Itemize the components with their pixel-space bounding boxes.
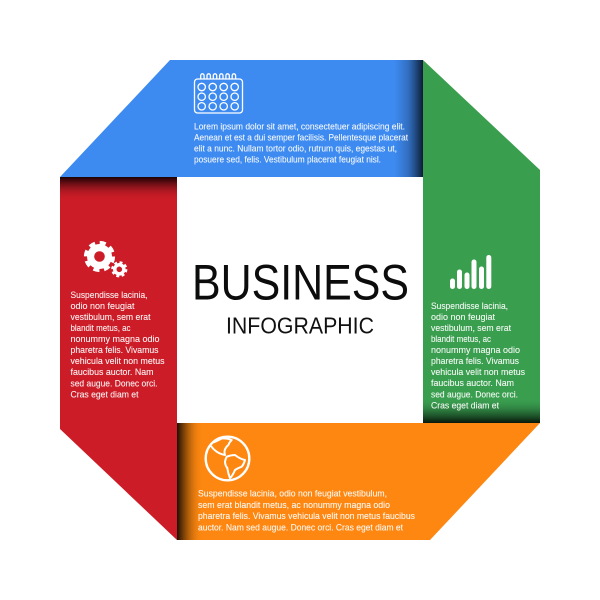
- text: red panel: sed augue. Donec orci.: [70, 378, 158, 390]
- text: green panel: odio non feugiat: [431, 312, 495, 323]
- icon: globe: [206, 437, 249, 480]
- text: green panel: nonummy magna odio: [431, 345, 520, 356]
- icon: calendar: [194, 74, 242, 113]
- text: red panel: vestibulum, sem erat: [70, 312, 151, 323]
- text: green panel: vestibulum, sem erat: [431, 323, 511, 334]
- text: blue panel: Aenean et est a dui semper facilisis. Pellentesque placerat: [194, 132, 408, 144]
- text: green panel: sed augue. Donec orci.: [431, 390, 518, 400]
- text: blue panel: posuere sed, felis. Vestibulum placerat feugiat nisl.: [194, 154, 381, 166]
- icon: gears: [86, 243, 126, 276]
- title: BUSINESS: [192, 254, 409, 310]
- text: red panel: Suspendisse lacinia,: [70, 290, 148, 301]
- text: blue panel: [194, 122, 408, 166]
- text: red panel: Cras eget diam et: [70, 390, 139, 400]
- icon: bar chart: [450, 255, 491, 289]
- text: red panel: nonummy magna odio: [70, 334, 160, 345]
- panel: orange bottom: [177, 423, 540, 540]
- text: blue panel: Lorem ipsum dolor sit amet, consectetuer adipiscing elit.: [194, 122, 405, 132]
- text: green panel: Cras eget diam et: [431, 400, 499, 412]
- text: green panel: Suspendisse lacinia,: [431, 301, 508, 312]
- text: orange panel: auctor. Nam sed augue. Donec orci. Cras eget diam et: [198, 522, 403, 534]
- text: orange panel: Suspendisse lacinia, odio non feugiat vestibulum,: [198, 488, 387, 500]
- text: orange panel: [198, 488, 415, 534]
- text: orange panel: pharetra felis. Vivamus vehicula velit non metus faucibus: [198, 511, 415, 522]
- text: green panel: blandit metus, ac: [431, 334, 491, 345]
- text: green panel: pharetra felis. Vivamus: [431, 356, 519, 367]
- text: red panel: blandit metus, ac: [70, 323, 131, 334]
- text: red panel: faucibus auctor. Nam: [70, 367, 154, 378]
- text: blue panel: elit a nunc. Nullam tortor odio, rutrum quis, egestas ut,: [194, 144, 397, 154]
- text: green panel: vehicula velit non metus: [431, 367, 525, 378]
- panel: green right: [423, 60, 540, 423]
- text: red panel: vehicula velit non metus: [70, 356, 165, 367]
- panel: blue top: [60, 60, 423, 177]
- text: green panel: [431, 301, 525, 412]
- title: [192, 254, 409, 338]
- text: red panel: pharetra felis. Vivamus: [70, 345, 159, 356]
- subtitle: INFOGRAPHIC: [226, 312, 374, 338]
- text: red panel: odio non feugiat: [70, 301, 135, 312]
- text: green panel: faucibus auctor. Nam: [431, 378, 514, 389]
- text: orange panel: sem erat blandit metus, ac nonummy magna odio: [198, 500, 390, 511]
- panel: red left: [60, 177, 177, 540]
- text: red panel: [70, 290, 165, 400]
